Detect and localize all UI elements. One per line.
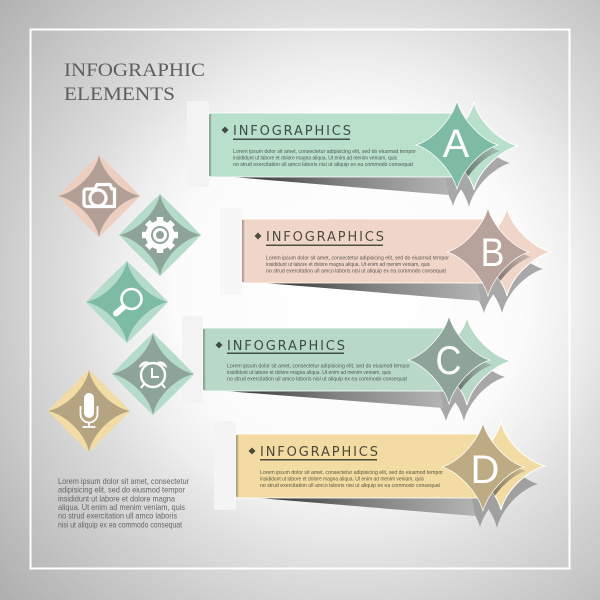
- paragraph: [58, 477, 189, 529]
- body text A: Lorem ipsum dolor sit amet, consectetur adipisicing elit, sed do eiusmod tempor: [233, 149, 416, 155]
- body text C: [227, 364, 410, 382]
- paragraph: insididunt ut labore et dolore magna: [58, 494, 175, 503]
- letter C: C: [436, 339, 462, 383]
- letter D: D: [471, 448, 499, 492]
- front star D: [442, 423, 524, 511]
- front star C: [408, 316, 490, 404]
- body text B: [266, 256, 449, 274]
- panel A: [187, 101, 518, 207]
- back star C: [423, 317, 511, 405]
- icon: microphone: [80, 393, 98, 427]
- panel C: [182, 316, 511, 421]
- diamond: clock: [112, 333, 194, 415]
- ribbon A: [209, 113, 454, 177]
- ribbon B: [242, 219, 487, 283]
- icon: clock: [139, 361, 167, 388]
- body text B: Lorem ipsum dolor sit amet, consectetur adipisicing elit, sed do eiusmod tempor: [266, 256, 449, 262]
- heading D: INFOGRAPHICS: [260, 445, 378, 460]
- diamond: camera: [58, 155, 140, 237]
- panel D: [214, 421, 545, 528]
- paragraph: nisi ut aliquip ex ea commodo consequat: [58, 520, 183, 529]
- icon: gear: [142, 217, 178, 253]
- heading C: INFOGRAPHICS: [227, 339, 345, 354]
- tab C: [182, 316, 203, 403]
- back star A: [430, 102, 518, 190]
- icon: camera: [84, 184, 114, 206]
- heading A: INFOGRAPHICS: [233, 124, 351, 139]
- title: INFOGRAPHIC: [64, 60, 205, 81]
- body text C: Lorem ipsum dolor sit amet, consectetur adipisicing elit, sed do eiusmod tempor: [227, 364, 410, 370]
- body text C: insididunt ut labore et dolore magna aliqua. Ut enim ad menim veniam, quis: [227, 370, 391, 376]
- body text A: [233, 149, 416, 168]
- body text A: insididunt ut labore et dolore magna aliqua. Ut enim ad menim veniam, quis: [233, 156, 397, 162]
- body text D: [260, 470, 443, 489]
- tab B: [220, 208, 242, 295]
- icon: magnifier: [116, 289, 142, 314]
- back star B: [463, 208, 551, 296]
- front star A: [416, 101, 498, 189]
- body text D: Lorem ipsum dolor sit amet, consectetur adipisicing elit, sed do eiusmod tempor: [260, 470, 443, 476]
- title: ELEMENTS: [64, 84, 175, 105]
- panel B: [220, 208, 551, 313]
- diamond: gear: [119, 194, 201, 276]
- star shadow C: [405, 333, 505, 421]
- ribbon shadow A: [232, 177, 449, 195]
- ribbon C: [203, 328, 448, 391]
- letter A: A: [443, 122, 470, 166]
- tab A: [187, 101, 209, 187]
- star shadow A: [412, 118, 510, 207]
- diamond: magnifier: [86, 261, 168, 343]
- ribbon shadow C: [225, 391, 443, 408]
- diamond: microphone: [48, 370, 130, 452]
- paragraph: Lorem ipsum dolor sit amet, consectetur: [58, 477, 189, 486]
- letter B: B: [480, 231, 504, 275]
- body text C: no strud exercitation ull amco laboris nisi ut aliquip ex ea commodo consequat: [227, 376, 407, 382]
- paragraph: no strud exercitation ull amco laboris: [58, 512, 177, 521]
- tab D: [214, 421, 236, 510]
- ribbon D: [236, 434, 483, 498]
- ribbon shadow B: [264, 283, 481, 301]
- front star B: [447, 208, 529, 296]
- star shadow D: [439, 439, 538, 528]
- body text B: insididunt ut labore et dolore magna aliqua. Ut enim ad menim veniam, quis: [266, 262, 430, 268]
- star shadow B: [443, 225, 543, 313]
- body text B: no strud exercitation ull amco laboris nisi ut aliquip ex ea commodo consequat: [266, 268, 446, 274]
- body text A: no strud exercitation ull amco laboris nisi ut aliquip ex ea commodo consequat: [233, 162, 413, 168]
- paragraph: adipisicing elit, sed do eiusmod tempor: [58, 486, 185, 495]
- back star D: [457, 422, 545, 510]
- body text D: no strud exercitation ull amco laboris nisi ut aliquip ex ea commodo consequat: [260, 483, 440, 489]
- body text D: insididunt ut labore et dolore magna aliqua. Ut enim ad menim veniam, quis: [260, 476, 424, 482]
- ribbon shadow D: [258, 498, 475, 516]
- paragraph: aliqua. Ut enim ad menim veniam, quis: [58, 503, 185, 512]
- heading B: INFOGRAPHICS: [266, 230, 384, 245]
